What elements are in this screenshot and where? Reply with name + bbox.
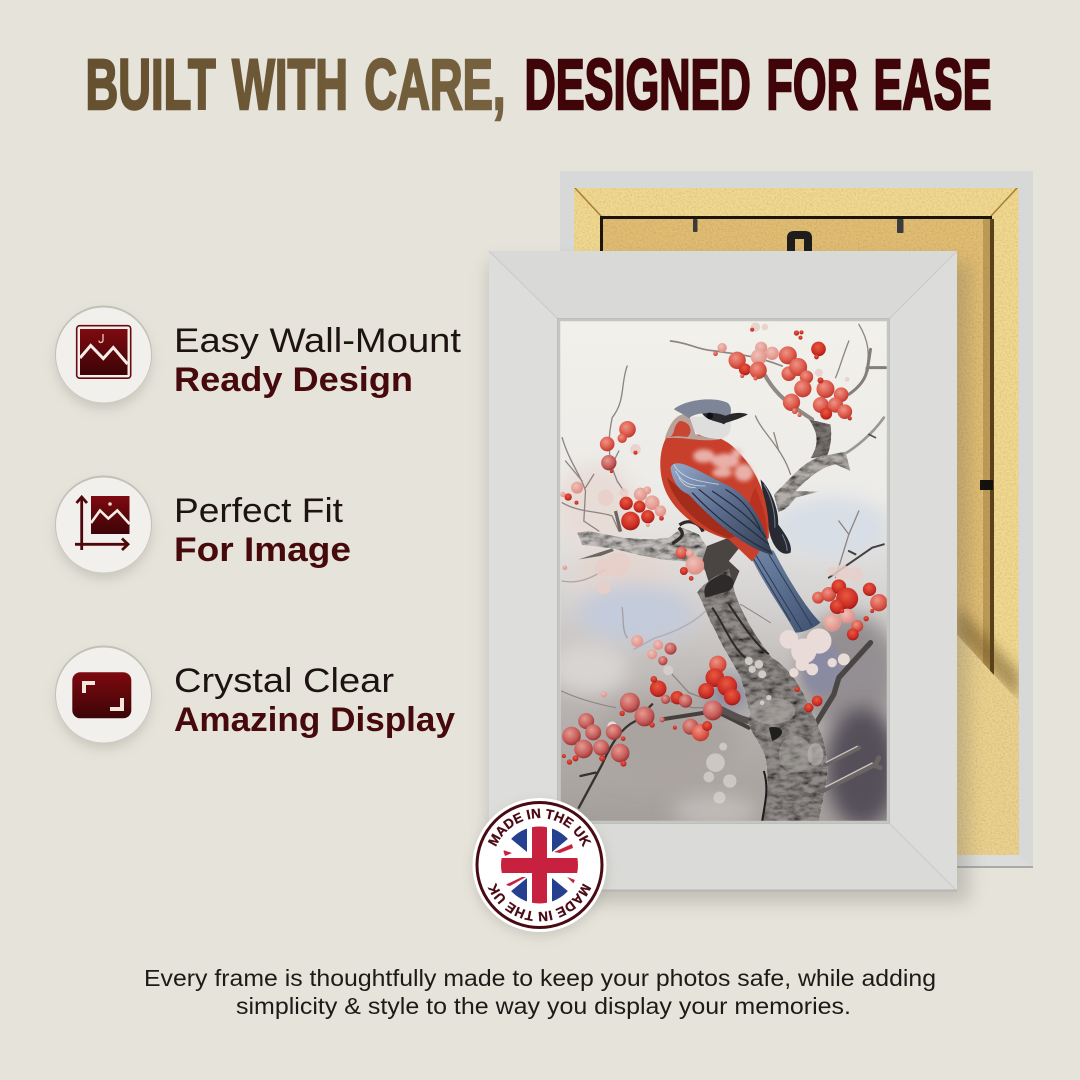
cap [674, 399, 731, 418]
circular text [488, 808, 592, 922]
inner backing board [600, 216, 992, 716]
label: easy wall-mount ready design [174, 322, 462, 399]
chest shade [667, 478, 742, 538]
feature: crystal clear [55, 646, 455, 748]
icon: wall-mount picture [55, 306, 152, 408]
circular text: MADE IN THE UK [488, 808, 592, 848]
icon: size arrows and picture [55, 476, 152, 578]
side clip [980, 480, 993, 490]
label: perfect fit for image: Perfect Fit [174, 492, 344, 530]
footer text [144, 965, 936, 1019]
neck [665, 414, 719, 440]
footer text: Every frame is thoughtfully made to keep your photos safe, while adding [144, 965, 936, 991]
face [690, 417, 731, 439]
title: BUILT WITH CARE, [86, 46, 506, 125]
front frame [489, 251, 957, 892]
pale blossoms [607, 614, 850, 731]
berries: top right cluster [713, 328, 852, 420]
tree trunk [697, 569, 827, 821]
feature: easy wall-mount [55, 306, 462, 408]
tail [752, 549, 820, 633]
label: perfect fit for image: For Image [174, 531, 351, 569]
label: perfect fit for image [174, 492, 351, 569]
label: crystal clear amazing display [174, 662, 455, 739]
berries: lower middle cluster [631, 635, 740, 741]
badge: made in the UK [470, 798, 610, 939]
wing tip [760, 479, 791, 554]
lower right twigs [822, 746, 880, 791]
wall clips [693, 219, 904, 233]
easel stand [957, 605, 1019, 855]
framed painting: bird on berry branch [549, 321, 899, 828]
union jack flag [499, 825, 580, 905]
circular text: MADE IN THE UK [488, 882, 592, 922]
label: crystal clear amazing display: Crystal Clear [174, 662, 394, 700]
cardboard border [574, 188, 1018, 855]
label: easy wall-mount ready design: Ready Design [174, 361, 413, 399]
tree branches [579, 349, 885, 808]
inner frame lip on painting [559, 320, 888, 822]
upper right branch [774, 419, 850, 512]
back of frame [560, 171, 1033, 868]
label: crystal clear amazing display: Amazing Display [174, 701, 455, 739]
label: easy wall-mount ready design: Easy Wall-Mount [174, 322, 462, 360]
front frame shadow [489, 262, 969, 902]
bird [660, 399, 791, 562]
pale ghost blossoms [663, 665, 736, 804]
thin twigs [561, 324, 868, 708]
icon: display corners [55, 646, 152, 748]
left branch [577, 511, 739, 584]
feature: perfect fit [55, 476, 351, 578]
watercolour washes [549, 464, 899, 828]
footer text: simplicity & style to the way you display your memories. [236, 993, 851, 1019]
berries: lower right cluster [794, 579, 887, 712]
body [660, 434, 769, 562]
hanger [787, 231, 812, 251]
blue wing [670, 463, 773, 555]
berries: lower left cluster [562, 691, 655, 767]
berries: left cluster [560, 421, 704, 581]
